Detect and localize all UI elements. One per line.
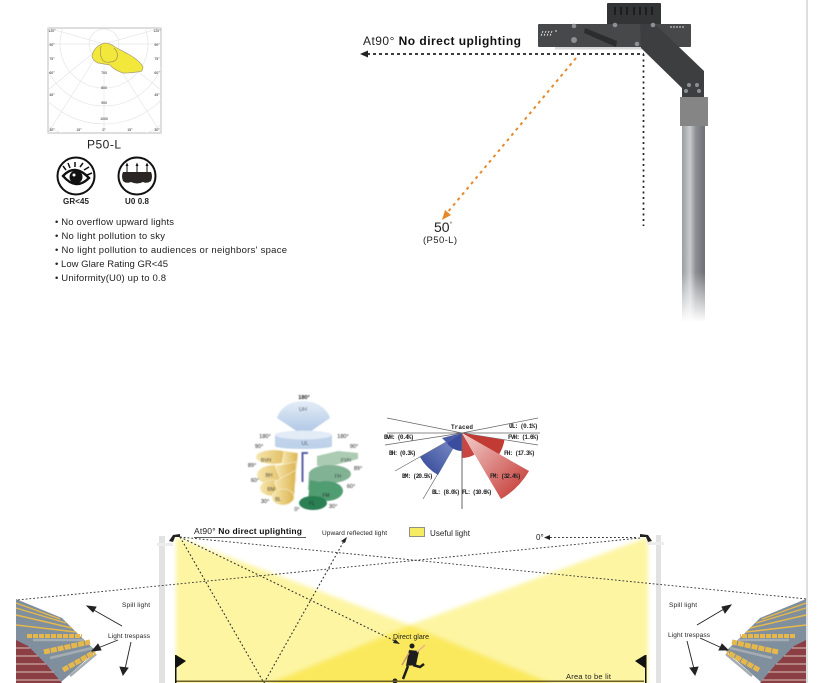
fixture lamp body	[538, 24, 691, 47]
beam model label: (P50-L)	[423, 235, 457, 246]
zonal labels: FL	[309, 501, 315, 507]
feature list: • Low Glare Rating GR<45	[55, 259, 168, 270]
feature list: • Uniformity(U0) up to 0.8	[55, 273, 166, 284]
right trespass arrows	[687, 605, 731, 675]
light pole	[678, 97, 709, 322]
ground line	[176, 680, 644, 682]
beam angle label: °	[450, 222, 453, 228]
chart labels: FH: (17.3%)	[504, 450, 535, 457]
polar tick labels: 60°	[154, 71, 160, 75]
dotted light rays	[17, 537, 807, 683]
left spill and trespass labels: Spill light	[122, 602, 150, 609]
icon: glare eye	[58, 158, 94, 194]
zonal labels: BL	[275, 497, 281, 503]
left spill and trespass labels: Light trespass	[108, 633, 151, 640]
heading: no direct uplighting: At90° No direct uplighting	[363, 34, 521, 48]
zonal labels: FVH	[341, 458, 351, 464]
UL disc	[275, 430, 332, 449]
left trespass arrows	[87, 606, 131, 675]
chart labels: FM: (32.4%)	[490, 473, 521, 480]
polar tick labels: 120°	[153, 29, 161, 33]
left fixture	[169, 534, 180, 542]
football player	[392, 644, 425, 683]
uniformity label: U0 0.8	[125, 197, 150, 206]
light beams on the pitch	[176, 537, 648, 683]
zonal labels: 90°	[255, 444, 263, 450]
arrow: horizontal 90 degree limit	[360, 50, 644, 58]
front light zones	[299, 451, 358, 510]
left spectator stand	[16, 599, 96, 683]
label: direct glare: Direct glare	[393, 634, 429, 641]
icon: uniformity	[118, 158, 156, 194]
zonal labels: 89°	[248, 463, 256, 469]
right spill and trespass labels: Light trespass	[668, 632, 711, 639]
fixture driver box	[607, 3, 661, 25]
back light zones	[256, 450, 298, 505]
zonal labels: BVH	[261, 458, 272, 464]
polar tick labels: 30°	[49, 128, 55, 132]
polar tick labels: 90°	[154, 43, 160, 47]
label: zero degrees: 0°	[536, 533, 544, 542]
page edge line	[806, 0, 808, 683]
chart labels: UL: (0.1%)	[509, 423, 538, 430]
floodlight fixture	[538, 3, 704, 97]
glare rating label: GR<45	[63, 197, 90, 206]
heading: lower no direct uplighting: At90° No direct uplighting	[194, 526, 302, 536]
zonal labels: BH	[266, 473, 273, 479]
polar curve	[92, 43, 143, 73]
zonal labels: UH	[299, 407, 307, 413]
chart labels: BM: (20.5%)	[402, 473, 433, 480]
right fixture	[640, 534, 652, 542]
right spectator stand	[726, 599, 806, 683]
arrow: 50 degree beam	[442, 58, 576, 220]
zonal labels: 180°	[337, 434, 349, 440]
ray arrowheads	[341, 535, 550, 644]
chart labels	[384, 423, 539, 496]
chart labels: FL: (10.6%)	[462, 489, 492, 496]
polar tick labels: 75°	[49, 57, 55, 61]
hemisphere zonal diagram	[248, 395, 362, 513]
left flag	[175, 655, 186, 683]
right spill and trespass labels	[668, 602, 711, 639]
zonal labels: 30°	[329, 504, 337, 510]
polar tick labels: 60°	[49, 71, 55, 75]
polar tick labels: 15°	[127, 128, 133, 132]
polar tick labels: 900	[101, 101, 107, 105]
zonal labels: FH	[335, 474, 342, 480]
feature list: • No light pollution to sky	[55, 231, 165, 242]
chart labels: BL: (8.0%)	[432, 489, 460, 496]
zonal labels: 0°	[294, 507, 300, 513]
polar tick labels: 700	[101, 71, 107, 75]
zonal labels: BM	[267, 487, 275, 493]
TM-15 lumen distribution chart	[384, 418, 540, 509]
polar tick labels: 800	[101, 86, 107, 90]
right flag	[635, 655, 646, 683]
polar tick labels: 0°	[102, 128, 106, 132]
polar tick labels	[48, 29, 161, 132]
red forward wedges	[462, 433, 504, 454]
chart labels: BVH: (0.4%)	[384, 434, 414, 441]
zonal labels: 89°	[354, 466, 362, 472]
right light pole	[647, 535, 664, 683]
polar tick labels: 75°	[154, 57, 160, 61]
vertical reference line	[642, 54, 644, 226]
beam angle label: 50	[434, 219, 450, 235]
polar tick labels: 1000	[100, 117, 108, 121]
chart labels: BH: (0.3%)	[389, 450, 416, 457]
polar tick labels: 45°	[49, 93, 55, 97]
UH dome	[277, 401, 330, 436]
zonal labels: UL	[301, 441, 309, 447]
fixture bracket arm	[640, 24, 704, 97]
polar tick labels: 120°	[48, 29, 56, 33]
polar tick labels: 90°	[49, 43, 55, 47]
polar light distribution chart	[48, 28, 162, 134]
right spill and trespass labels: Spill light	[669, 602, 697, 609]
bracket mast	[302, 453, 308, 482]
chart labels: FVH: (1.6%)	[508, 434, 539, 441]
label: area to be lit: Area to be lit	[566, 672, 612, 681]
left spill and trespass labels	[108, 602, 151, 640]
zonal labels: 180°	[259, 434, 271, 440]
polar tick labels: 45°	[154, 93, 160, 97]
zonal labels: 90°	[350, 444, 358, 450]
zonal labels: 180°	[298, 395, 310, 401]
legend: useful light: Useful light	[430, 529, 471, 538]
heading underline	[194, 536, 306, 539]
zonal labels: 30°	[261, 499, 269, 505]
chart labels: Traced	[451, 424, 473, 431]
left light pole	[157, 536, 173, 683]
zonal labels: FM	[322, 493, 330, 499]
polar tick labels: 30°	[154, 128, 160, 132]
zonal labels: 60°	[251, 478, 259, 484]
label: upward reflected light: Upward reflected light	[322, 530, 387, 537]
zonal labels: 60°	[347, 484, 355, 490]
blue backward wedges	[420, 433, 462, 475]
polar inner curve	[100, 46, 117, 62]
feature list: • No overflow upward lights	[55, 217, 174, 228]
zonal labels	[248, 395, 362, 513]
polar tick labels: 15°	[76, 128, 82, 132]
feature list	[55, 217, 287, 284]
legend: useful light	[410, 528, 471, 538]
polar chart caption: P50-L	[87, 138, 121, 152]
feature list: • No light pollution to audiences or neighbors' space	[55, 245, 287, 256]
